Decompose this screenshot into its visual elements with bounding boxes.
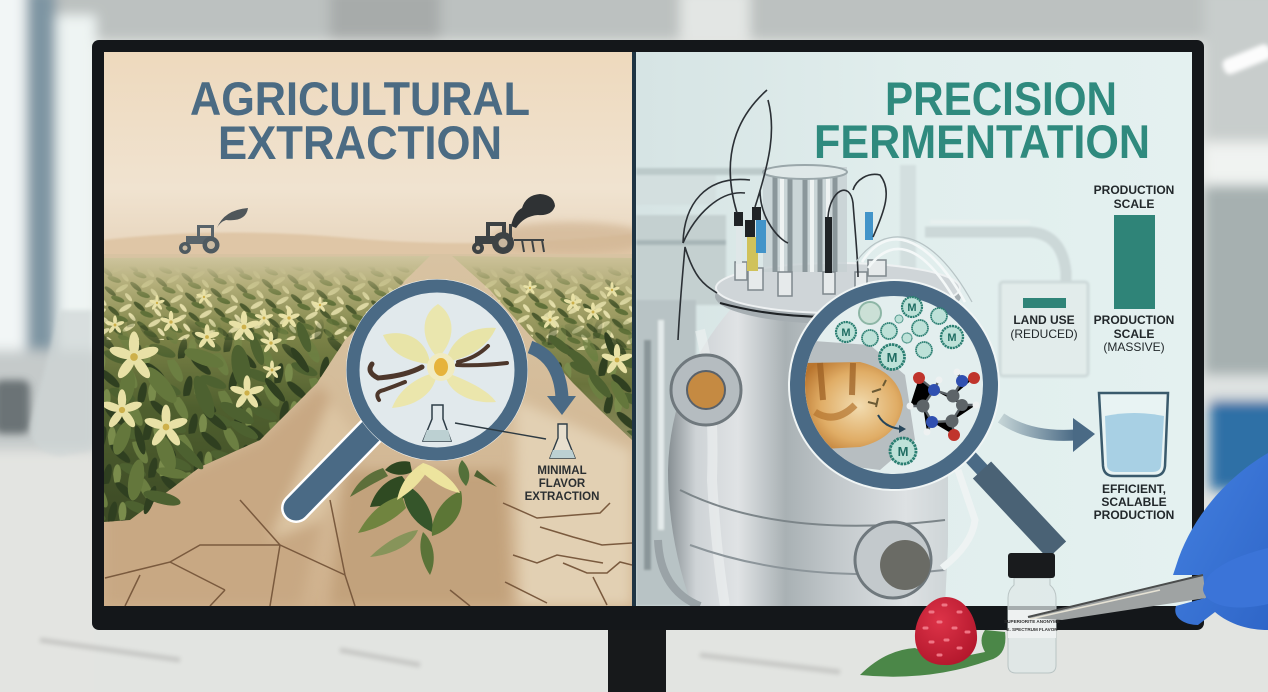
mid plant texture: [104, 262, 632, 350]
chart: production scale bar: [1094, 183, 1174, 354]
icon: beaker: [1099, 393, 1168, 476]
molecule: [911, 374, 974, 432]
label: efficient scalable production: EFFICIENT,: [1102, 482, 1166, 496]
heading: agricultural extraction: AGRICULTURAL: [190, 72, 530, 125]
heading: precision fermentation: FERMENTATION: [814, 115, 1150, 168]
pointer line: [455, 423, 546, 439]
monitor frame: [92, 40, 1204, 630]
near plant texture: [104, 315, 632, 522]
heading: precision fermentation: [814, 72, 1150, 168]
heading: precision fermentation: PRECISION: [885, 72, 1117, 125]
microbes: M: [898, 444, 908, 459]
foreground: tweezers and gloved hand: [1028, 453, 1268, 630]
chart: land use bar: [1010, 298, 1078, 341]
right crop row: [452, 256, 632, 440]
curved arrow: [530, 347, 576, 415]
foreground: vial: SUPERIORITE ANONYME: [1004, 619, 1060, 624]
pipe bottom: [658, 540, 700, 606]
lens: [346, 279, 528, 461]
cracked earth: [105, 500, 632, 606]
foreground: vial: [1004, 553, 1060, 673]
microbes: [836, 297, 963, 464]
left porthole: [671, 355, 741, 425]
monitor stand: [608, 628, 666, 692]
probes: [734, 207, 873, 273]
flower petals: [424, 304, 452, 358]
tractor left: [179, 208, 248, 254]
chart: production scale bar: PRODUCTION: [1094, 313, 1174, 327]
dust haze: [490, 222, 650, 254]
lens: [788, 279, 1000, 491]
central column: [763, 167, 847, 272]
blurred lab equipment: [636, 165, 1088, 606]
label: minimal flavor extraction: EXTRACTION: [525, 491, 599, 503]
tank lid: [715, 293, 961, 323]
steel frame: [800, 340, 915, 470]
label: minimal flavor extraction: FLAVOR: [539, 478, 586, 490]
chart: production scale bar: PRODUCTION: [1094, 183, 1174, 197]
vanilla pods: [370, 364, 422, 378]
heading: agricultural extraction: [190, 72, 530, 169]
microbes: M: [907, 302, 917, 314]
label: efficient scalable production: SCALABLE: [1101, 495, 1167, 509]
handle: [962, 448, 990, 478]
reactor window: [805, 362, 903, 450]
panel: precision fermentation: [636, 52, 1192, 606]
distant hills: [104, 232, 632, 254]
heading: agricultural extraction: EXTRACTION: [218, 116, 502, 169]
soil ground: [104, 254, 632, 606]
chart: production scale bar: SCALE: [1114, 197, 1154, 211]
microbes: M: [887, 350, 897, 365]
lid fittings: [735, 260, 886, 296]
handle: [296, 430, 372, 508]
arrow in lens: [878, 415, 902, 429]
soil shading: [104, 385, 632, 606]
arrow: to beaker: [1001, 418, 1095, 452]
lower porthole: [855, 522, 931, 598]
near leaves left: [109, 320, 314, 515]
flask icon: [423, 405, 451, 441]
chart: land use bar: (REDUCED): [1010, 327, 1078, 341]
icon: small flask: [550, 424, 575, 458]
left crop row: [104, 256, 430, 522]
chart: production scale bar: SCALE: [1114, 327, 1154, 341]
vanilla flowers left: [101, 289, 328, 448]
chart: production scale bar: (MASSIVE): [1103, 340, 1165, 354]
plants right: [523, 281, 633, 411]
label: efficient scalable production: PRODUCTION: [1094, 508, 1174, 522]
panel: agricultural extraction: [101, 52, 650, 606]
foreground: vial: E. SPECTRUM FLAVOR: [1006, 627, 1058, 632]
tank body: [668, 310, 948, 606]
cables: [678, 90, 886, 340]
background wash: [636, 52, 1192, 606]
magnifier: fermentation microbes: [788, 279, 1057, 550]
foreground: raspberry and mint: [860, 597, 1005, 677]
tractor right with smoke: [472, 194, 555, 254]
chart: land use bar: LAND USE: [1013, 313, 1075, 327]
sky background: [104, 52, 632, 262]
microbes: M: [841, 327, 851, 339]
microbes: M: [947, 332, 957, 344]
side pipe: [942, 470, 975, 568]
label: minimal flavor extraction: MINIMAL: [537, 465, 587, 477]
magnifier: vanilla flower: [296, 279, 546, 508]
seedling plant in foreground: [350, 460, 497, 575]
